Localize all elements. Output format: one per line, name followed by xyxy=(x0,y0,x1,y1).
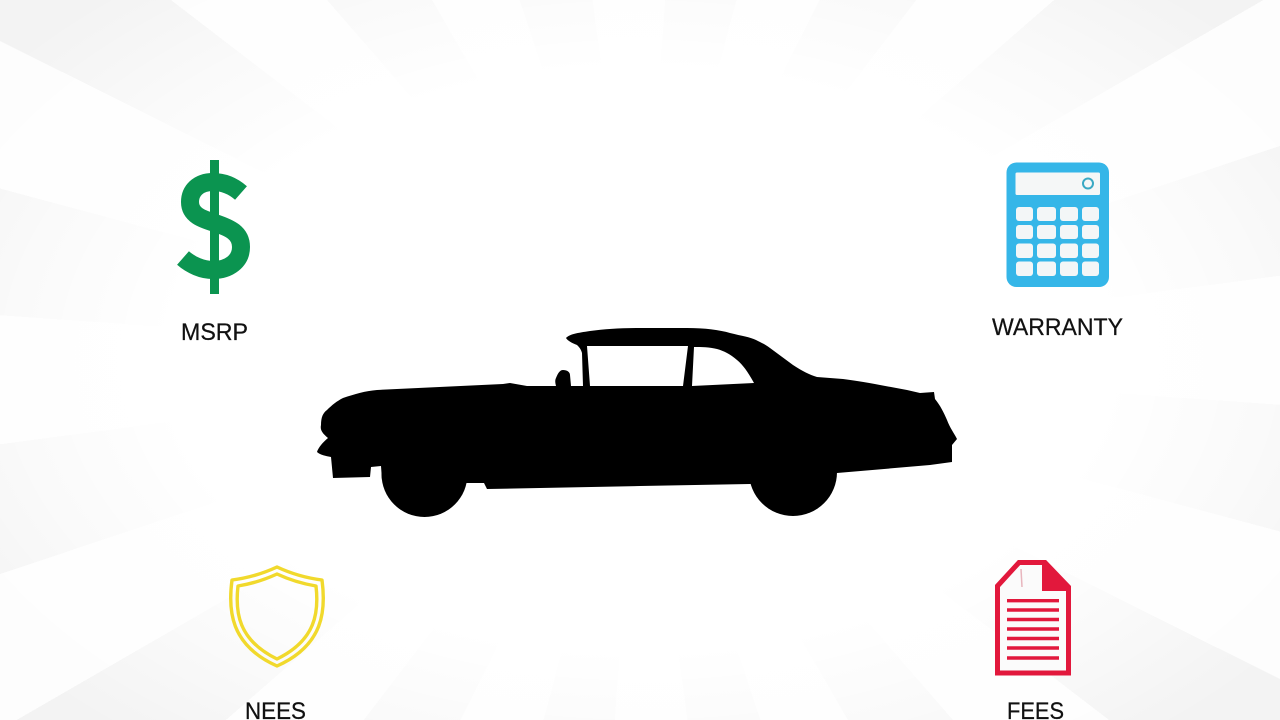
label: MSRP: MSRP xyxy=(181,319,248,346)
label: WARRANTY: WARRANTY xyxy=(992,314,1123,341)
icon: shield xyxy=(231,567,323,666)
icon: calculator xyxy=(1006,162,1109,287)
car silhouette xyxy=(317,328,957,517)
icon: dollar sign xyxy=(183,160,241,294)
icon: document xyxy=(998,561,1070,673)
